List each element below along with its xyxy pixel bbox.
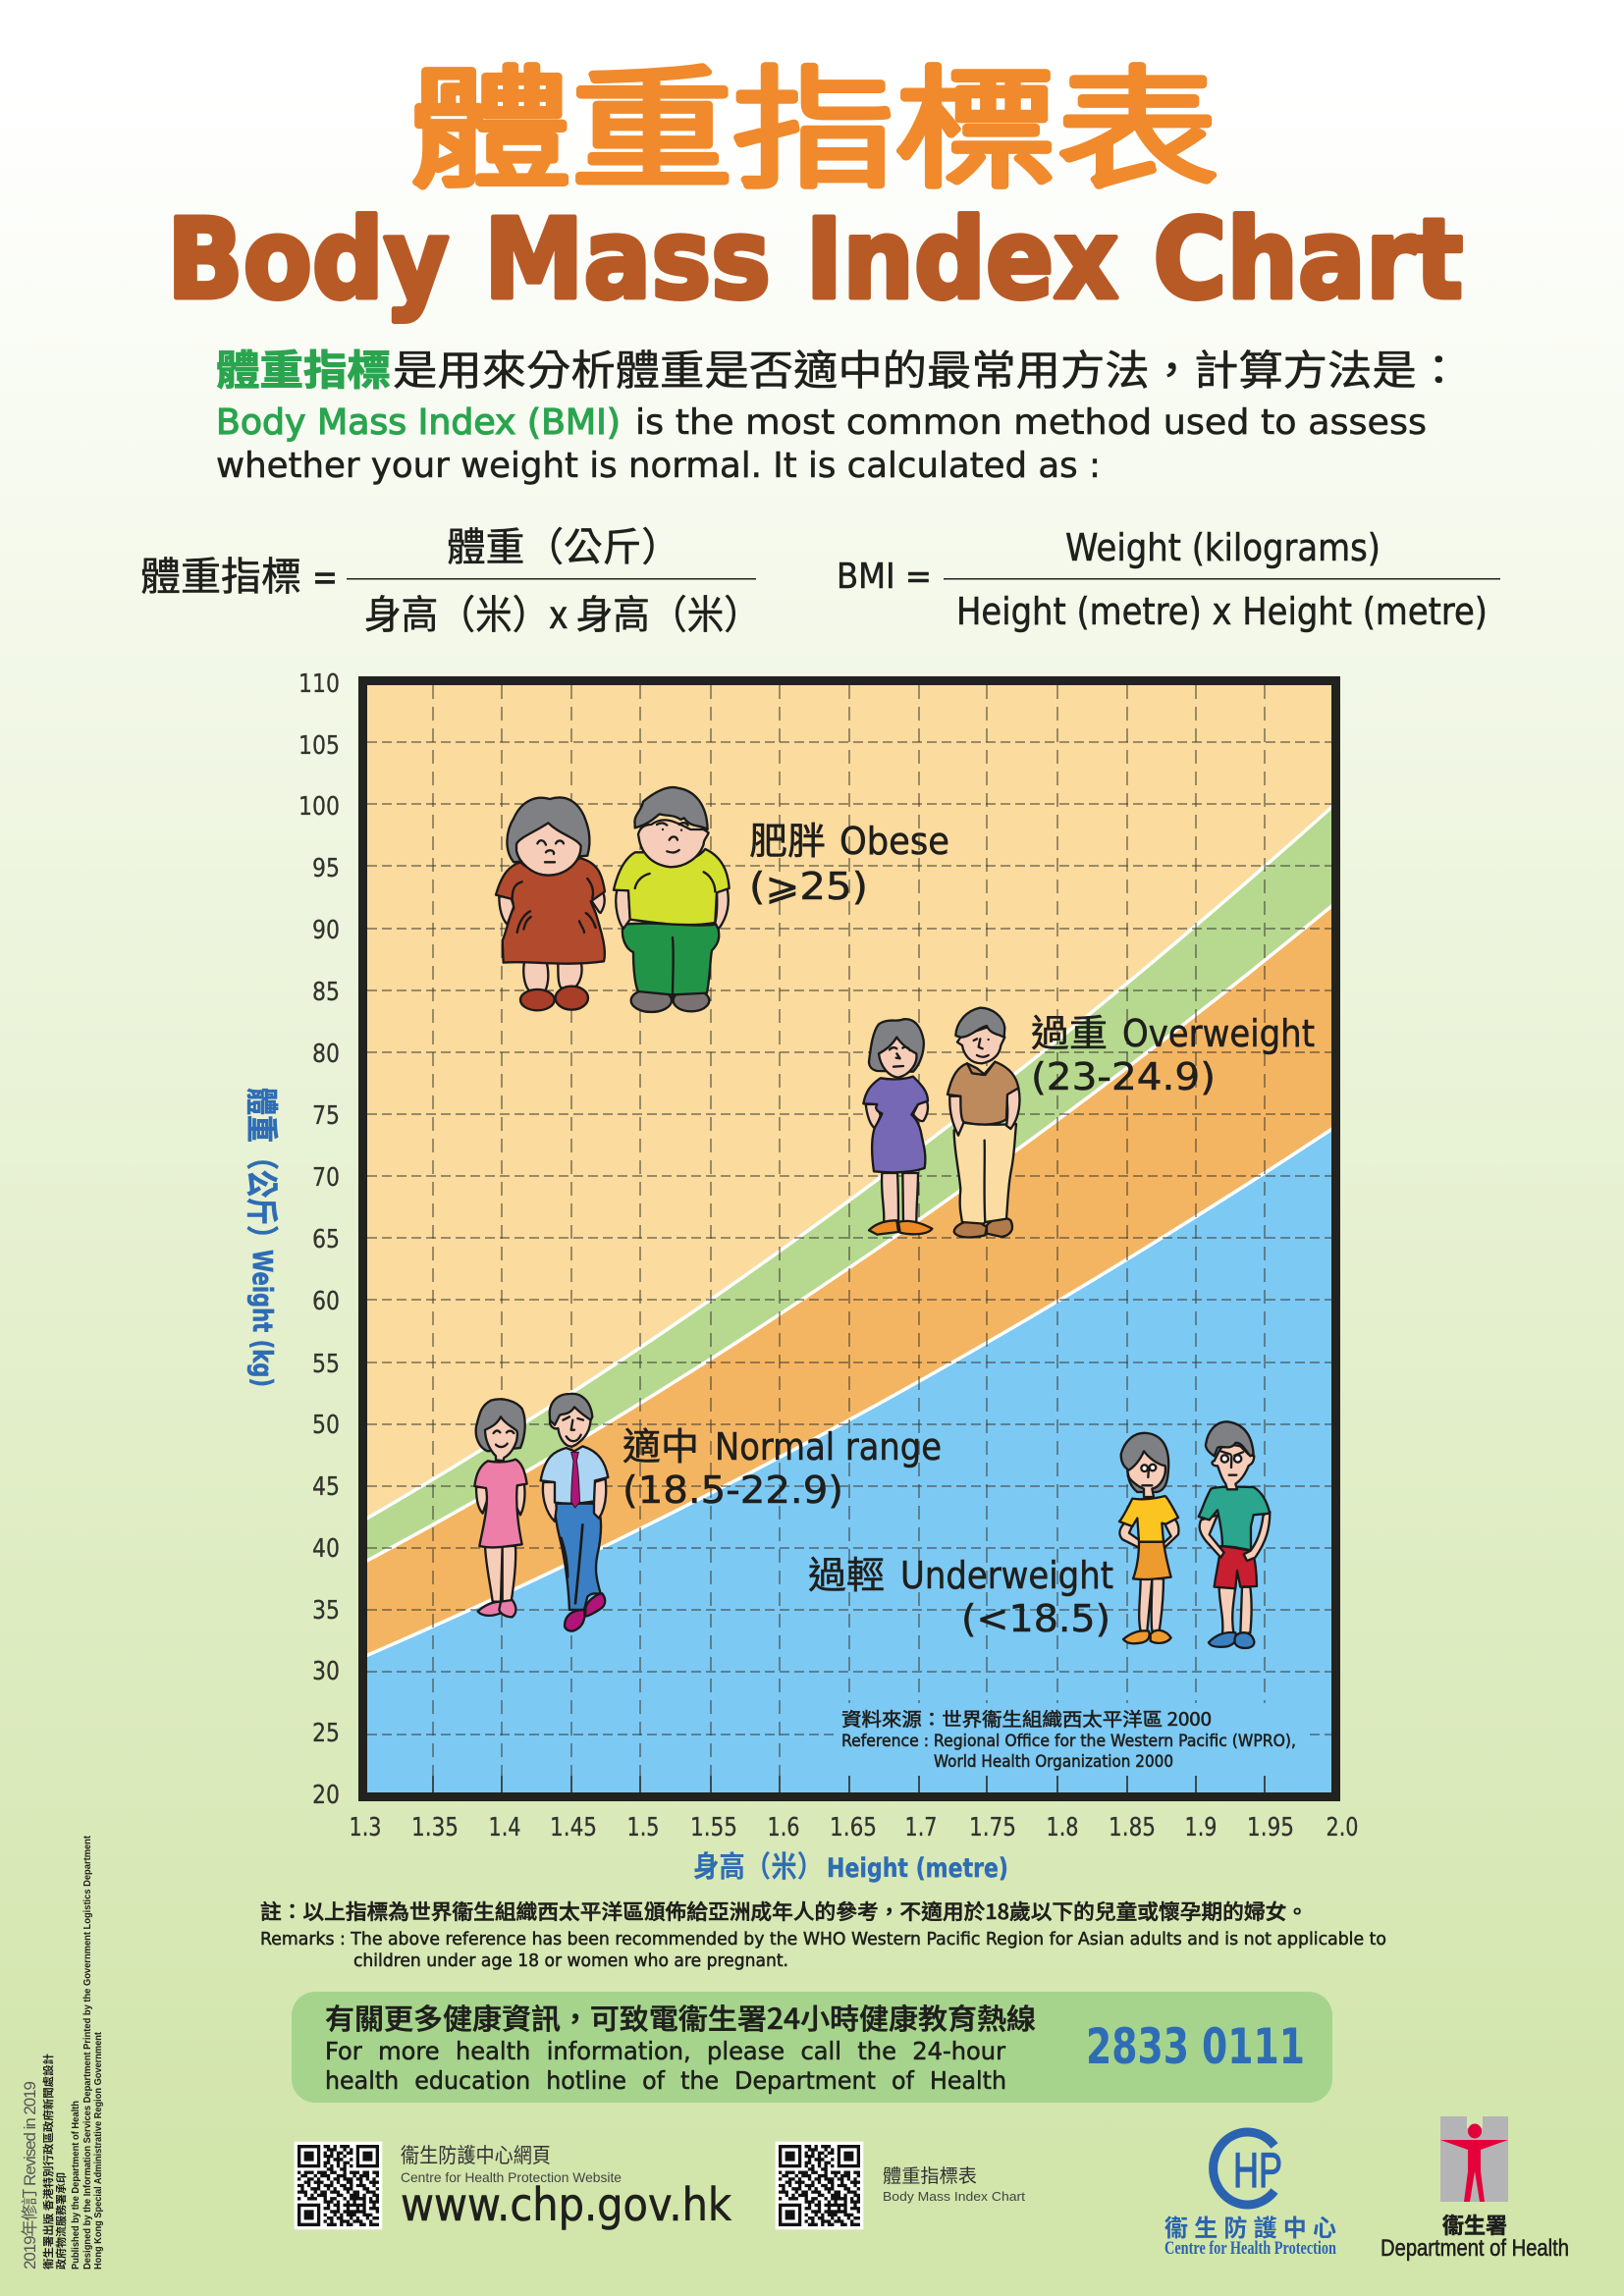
QR code: CHP website xyxy=(295,2142,382,2229)
x axis labels: 1.9 xyxy=(1184,1813,1218,1842)
hotline panel xyxy=(292,1992,1332,2103)
label: obese: (⩾25) xyxy=(749,865,868,908)
website text: Centre for Health Protection Website xyxy=(401,2169,622,2185)
remarks: children under age 18 or women who are pregnant. xyxy=(353,1950,788,1971)
overweight man xyxy=(947,1008,1019,1237)
x axis title: Height (metre) xyxy=(827,1853,1008,1884)
label: normal range: (18.5-22.9) xyxy=(623,1468,843,1512)
chart xyxy=(241,669,1359,1886)
BMI chart QR text xyxy=(883,2162,1025,2204)
intro: English line one: is the most common method used to assess xyxy=(635,402,1427,443)
x axis labels: 1.75 xyxy=(969,1813,1016,1842)
x axis labels: 1.95 xyxy=(1247,1813,1294,1842)
formula: Chinese: 身高（米）x 身高（米） xyxy=(364,583,761,640)
figures: obese couple xyxy=(496,787,730,1012)
y axis labels: 50 xyxy=(312,1411,340,1440)
x axis labels: 1.45 xyxy=(550,1813,597,1842)
label: underweight: 過輕 xyxy=(808,1545,885,1599)
y axis labels: 30 xyxy=(312,1657,340,1686)
icon: CHP emblem: HP xyxy=(1233,2143,1282,2198)
logo: Department of Health xyxy=(1380,2116,1569,2262)
formula: Chinese: 體重（公斤） xyxy=(447,515,680,572)
formula: English: Height (metre) x Height (metre) xyxy=(956,590,1488,633)
intro: English highlight: Body Mass Index (BMI) xyxy=(216,402,621,443)
y axis labels: 60 xyxy=(312,1287,340,1316)
remarks: Remarks : The above reference has been recommended by the WHO Western Pacific Region for Asian adults and is not applicable to xyxy=(260,1929,1386,1949)
remarks xyxy=(260,1896,1386,1971)
label: overweight: Overweight xyxy=(1122,1012,1315,1055)
reference note xyxy=(841,1705,1296,1772)
formula: English: Weight (kilograms) xyxy=(1065,526,1380,569)
x axis labels xyxy=(350,1813,1359,1842)
y axis labels: 55 xyxy=(312,1350,340,1379)
y axis labels: 70 xyxy=(312,1163,340,1193)
y axis labels: 20 xyxy=(312,1781,340,1810)
label: normal range: Normal range xyxy=(715,1425,942,1468)
plot area with BMI bands xyxy=(363,685,1335,1865)
intro text xyxy=(216,338,1461,486)
reference note: World Health Organization 2000 xyxy=(934,1752,1173,1772)
logo: Department of Health: Department of Health xyxy=(1380,2235,1569,2262)
y axis labels xyxy=(298,669,340,1810)
figures: normal couple xyxy=(474,1394,608,1631)
y axis labels: 45 xyxy=(312,1472,340,1502)
y axis labels: 80 xyxy=(312,1040,340,1069)
logo: Centre for Health Protection xyxy=(1164,2132,1336,2259)
label: underweight: (<18.5) xyxy=(961,1597,1110,1640)
x axis labels: 2.0 xyxy=(1326,1813,1359,1842)
publication credits: 政府物流服務署承印 xyxy=(53,2172,69,2269)
publication credits: Hong Kong Special Administrative Region Government xyxy=(92,2032,104,2269)
hotline: English xyxy=(325,2037,1006,2095)
logo: Centre for Health Protection: 衞生防護中心 xyxy=(1164,2209,1336,2243)
underweight man xyxy=(1199,1421,1270,1648)
icon: DH emblem xyxy=(1440,2116,1508,2202)
x axis labels: 1.4 xyxy=(489,1813,520,1842)
y axis labels: 100 xyxy=(298,792,340,822)
obese woman xyxy=(496,797,605,1010)
x axis title xyxy=(693,1842,1008,1886)
y axis title: Weight (kg) xyxy=(246,1250,279,1387)
formula: English: BMI = xyxy=(837,557,932,597)
y axis labels: 25 xyxy=(312,1719,340,1748)
obese man xyxy=(614,787,730,1012)
label: overweight: (23-24.9) xyxy=(1031,1055,1216,1098)
reference note: Reference : Regional Office for the Western Pacific (WPRO), xyxy=(841,1732,1296,1751)
y axis labels: 105 xyxy=(298,731,340,761)
hotline: English: For more health information, please call the 24-hour xyxy=(325,2037,1006,2065)
y axis labels: 110 xyxy=(298,669,340,699)
formula: English xyxy=(837,526,1500,633)
y axis labels: 40 xyxy=(312,1534,340,1564)
logo: Department of Health: 衞生署 xyxy=(1442,2209,1507,2240)
website text: 衞生防護中心網頁 xyxy=(401,2140,551,2169)
title xyxy=(167,24,1463,324)
publication credits: Published by the Department of Health xyxy=(70,2101,81,2269)
y axis labels: 90 xyxy=(312,916,340,945)
figures: overweight couple xyxy=(863,1008,1019,1237)
label: obese xyxy=(749,811,949,908)
label: obese: 肥胖 xyxy=(749,811,826,865)
y axis labels: 75 xyxy=(312,1101,340,1131)
x axis labels: 1.5 xyxy=(626,1813,660,1842)
intro: English line two: whether your weight is normal. It is calculated as : xyxy=(216,446,1101,486)
label: underweight: Underweight xyxy=(900,1554,1113,1597)
chart frame xyxy=(363,681,1335,1796)
x axis labels: 1.3 xyxy=(350,1813,381,1842)
publication credits xyxy=(21,1836,104,2269)
x axis labels: 1.8 xyxy=(1047,1813,1078,1842)
y axis labels: 95 xyxy=(312,854,340,883)
x axis labels: 1.55 xyxy=(690,1813,737,1842)
label: obese: Obese xyxy=(839,820,949,863)
website text: www.chp.gov.hk xyxy=(401,2178,731,2231)
intro: Chinese line highlight: 體重指標 xyxy=(216,338,391,398)
normal woman xyxy=(474,1399,527,1617)
figures: underweight couple xyxy=(1119,1421,1270,1648)
BMI chart QR text: 體重指標表 xyxy=(883,2162,977,2188)
label: overweight xyxy=(1031,1003,1315,1098)
formula: Chinese xyxy=(140,515,761,640)
x axis labels: 1.6 xyxy=(768,1813,799,1842)
y axis title xyxy=(241,1088,288,1387)
x axis labels: 1.7 xyxy=(905,1813,937,1842)
label: overweight: 過重 xyxy=(1031,1003,1108,1057)
title: Chinese: 體重指標表 xyxy=(409,24,1218,214)
x axis labels: 1.65 xyxy=(830,1813,877,1842)
y axis labels: 85 xyxy=(312,978,340,1007)
x axis labels: 1.85 xyxy=(1109,1813,1156,1842)
BMI chart QR text: Body Mass Index Chart xyxy=(883,2189,1025,2204)
x axis title: 身高（米） xyxy=(693,1842,823,1886)
publication credits: 2019年修訂 Revised in 2019 xyxy=(21,2081,39,2269)
title: English: Body Mass Index Chart xyxy=(167,196,1463,324)
formula: Chinese: = xyxy=(312,556,338,599)
icon: CHP emblem xyxy=(1214,2132,1282,2205)
normal man xyxy=(541,1394,608,1631)
logo: Centre for Health Protection: Centre for Health Protection xyxy=(1164,2238,1336,2259)
publication credits: 衞生署出版 香港特別行政區政府新聞處設計 xyxy=(40,2054,56,2269)
reference note: 資料來源：世界衞生組織西太平洋區 2000 xyxy=(841,1705,1212,1732)
label: normal range: 適中 xyxy=(623,1416,699,1470)
hotline: English: health education hotline of the Department of Health xyxy=(325,2066,1006,2095)
label: underweight xyxy=(808,1545,1113,1640)
overweight woman xyxy=(863,1019,932,1235)
label: normal range xyxy=(623,1416,942,1512)
y axis labels: 35 xyxy=(312,1596,340,1626)
y axis title: 體重（公斤） xyxy=(241,1088,288,1253)
website text xyxy=(401,2140,731,2231)
intro: Chinese line: 是用來分析體重是否適中的最常用方法，計算方法是： xyxy=(393,338,1461,398)
publication credits: Designed by the Information Services Department Printed by the Government Logistics Department xyxy=(81,1836,93,2269)
underweight woman xyxy=(1119,1433,1178,1643)
hotline: Chinese: 有關更多健康資訊，可致電衞生署24小時健康教育熱線 xyxy=(325,1997,1036,2038)
x axis labels: 1.35 xyxy=(411,1813,459,1842)
y axis labels: 65 xyxy=(312,1225,340,1255)
QR code: BMI chart xyxy=(776,2142,863,2229)
formula: Chinese: 體重指標 xyxy=(140,545,301,602)
remarks: 註：以上指標為世界衞生組織西太平洋區頒佈給亞洲成年人的參考，不適用於18歲以下的兒童或懷孕期的婦女。 xyxy=(260,1896,1308,1926)
hotline: phone number: 2833 0111 xyxy=(1086,2018,1305,2075)
